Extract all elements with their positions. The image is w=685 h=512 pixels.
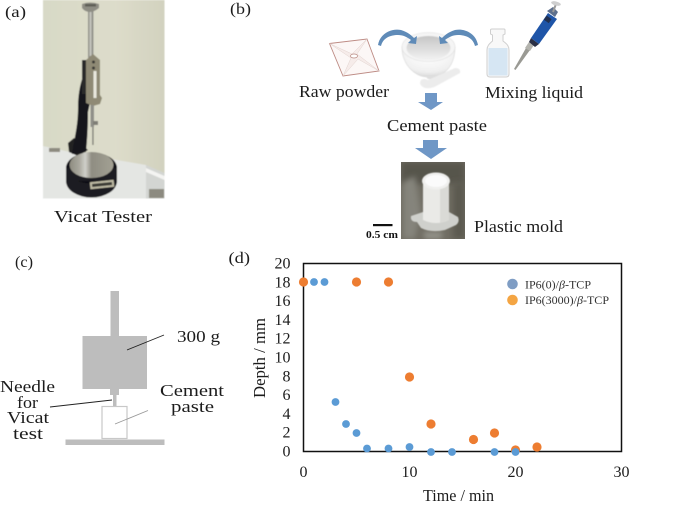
y axis tick labels: 4 <box>282 406 290 423</box>
y axis tick labels: 20 <box>274 256 290 272</box>
x axis tick labels: 10 <box>402 464 418 481</box>
leader line: cement paste <box>115 410 148 424</box>
legend: IP6(3000)/β-TCP <box>525 293 609 307</box>
schematic: weight, needle, paste, base <box>66 291 164 445</box>
y axis tick labels: 14 <box>274 312 290 329</box>
scale bar: 0.5 cm <box>366 224 399 241</box>
arrow: raw powder into mortar <box>378 30 417 46</box>
panel: (b) cement paste preparation <box>230 0 584 241</box>
label (d): (d) <box>228 250 250 267</box>
label (a): (a) <box>5 4 26 21</box>
label: Cement paste: Cement paste <box>387 116 487 135</box>
icon: raw powder on weighing paper <box>330 39 379 76</box>
plot frame <box>304 264 622 452</box>
caption: Vicat Tester: Vicat Tester <box>54 207 153 226</box>
y axis tick labels: 10 <box>274 350 290 366</box>
y axis tick labels: 8 <box>282 368 290 385</box>
label (b): (b) <box>230 1 251 18</box>
x axis title: Time / min <box>423 486 494 505</box>
panel: (c) Vicat test schematic <box>0 254 225 445</box>
icon: mortar and pestle <box>402 32 460 88</box>
label (c): (c) <box>15 254 33 271</box>
label: Cement paste: paste <box>171 397 214 416</box>
scatter chart <box>250 256 630 505</box>
y axis tick labels: 0 <box>282 444 290 460</box>
series: IP6(0)/β-TCP <box>310 278 498 456</box>
y axis tick labels: 16 <box>274 293 290 310</box>
legend: IP6(0)/β-TCP <box>525 278 591 292</box>
y axis tick labels: 12 <box>274 331 290 348</box>
label: Raw powder: Raw powder <box>299 82 390 101</box>
label: Needle for Vicat test: test <box>13 424 44 443</box>
leader line: 300 g <box>127 335 164 350</box>
x axis tick labels: 0 <box>300 464 308 481</box>
arrow: mixing liquid into mortar <box>439 30 478 46</box>
panel: (d) depth versus time chart <box>228 250 630 505</box>
arrow: down to cement paste <box>418 93 443 110</box>
legend <box>507 278 609 307</box>
label: Needle for Vicat test <box>0 377 55 443</box>
icon: micropipette <box>514 0 561 70</box>
y axis tick labels: 18 <box>274 274 290 291</box>
label: Needle for Vicat test: Vicat <box>7 408 49 427</box>
y axis tick labels <box>274 256 290 460</box>
icon: mixing liquid bottle <box>487 29 509 77</box>
label: Needle for Vicat test: Needle <box>0 377 55 396</box>
label: Plastic mold: Plastic mold <box>474 217 564 236</box>
photo: Vicat tester <box>43 0 164 198</box>
y axis tick labels: 2 <box>282 425 290 442</box>
label: Mixing liquid: Mixing liquid <box>485 83 584 102</box>
scale bar: 0.5 cm: 0.5 cm <box>366 230 399 241</box>
label: Needle for Vicat test: for <box>17 393 39 412</box>
x axis tick labels: 20 <box>508 464 524 481</box>
arrow: down to plastic mold <box>415 140 447 159</box>
x axis tick labels <box>300 464 630 481</box>
panel: (a) Vicat tester <box>5 0 164 226</box>
label: Cement paste: Cement <box>160 381 225 400</box>
y axis title: Depth / mm <box>250 318 269 398</box>
leader line: needle <box>50 400 112 407</box>
x axis tick labels: 30 <box>614 464 630 481</box>
label: 300 g: 300 g <box>177 327 220 346</box>
label: Cement paste <box>160 381 225 416</box>
photo: plastic mold <box>401 162 465 239</box>
series: IP6(3000)/β-TCP <box>299 277 542 455</box>
y axis tick labels: 6 <box>282 387 290 404</box>
